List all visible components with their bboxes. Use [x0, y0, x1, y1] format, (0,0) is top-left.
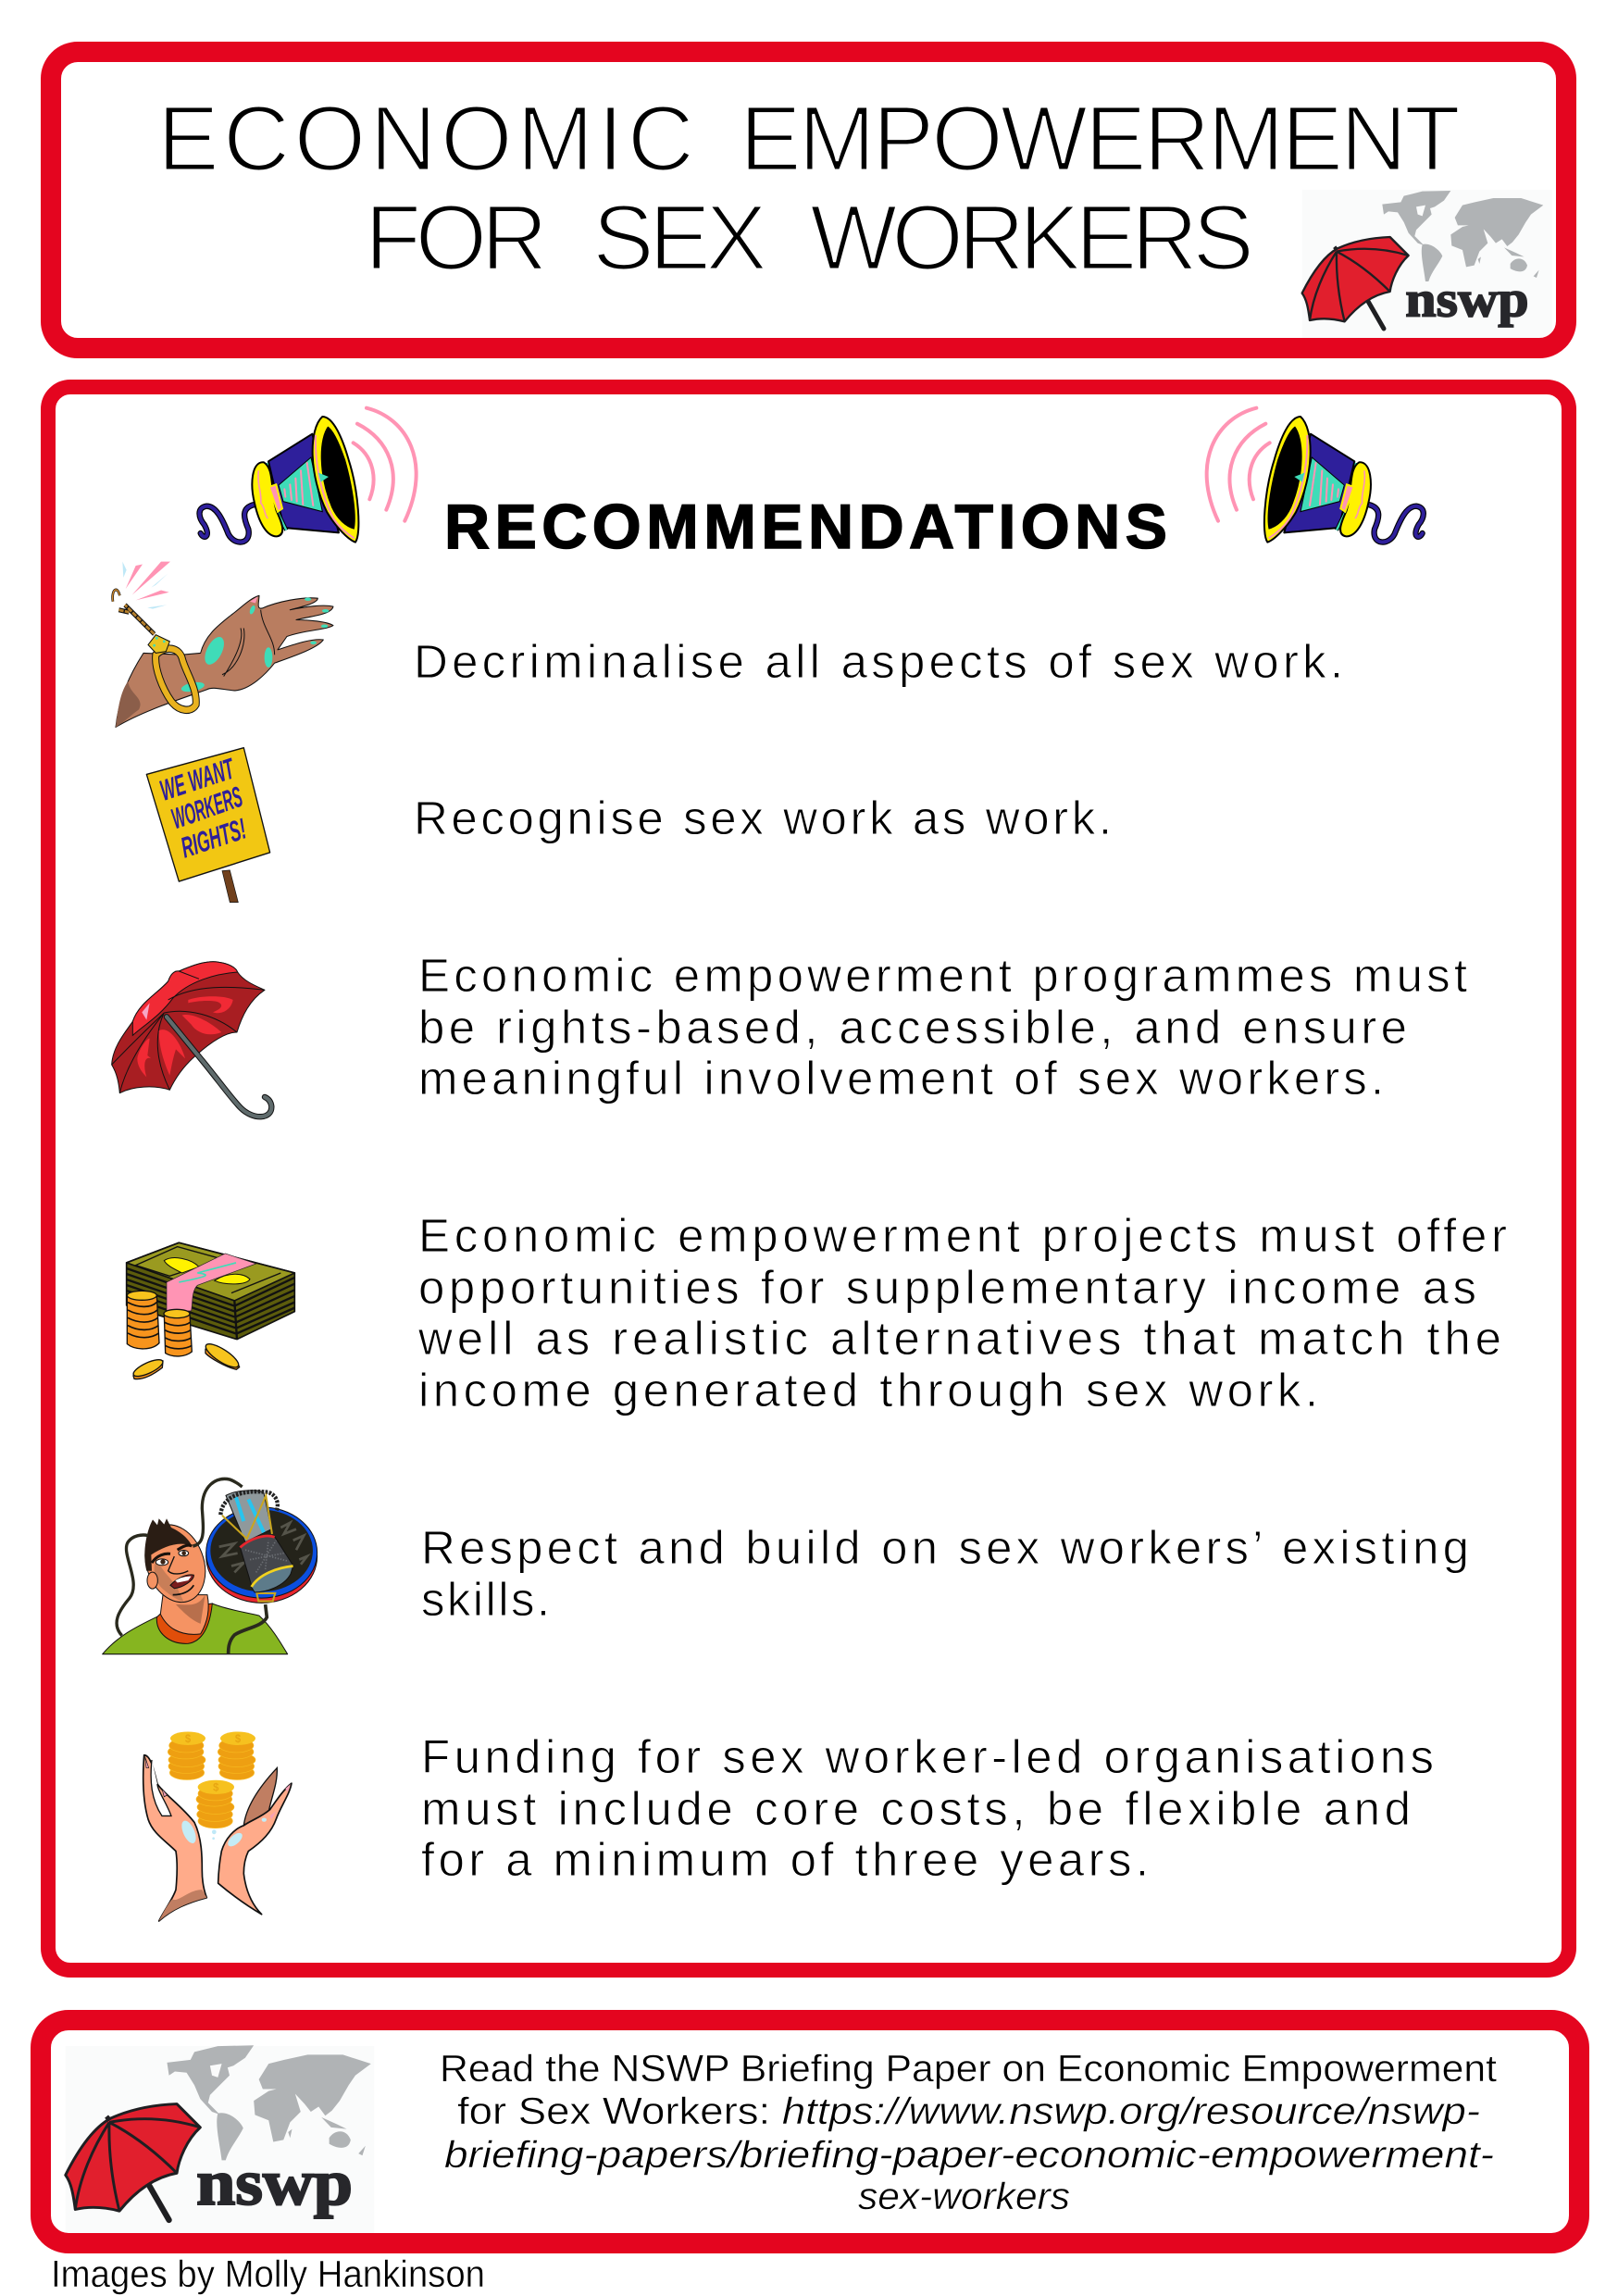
title frame — [51, 52, 1566, 348]
panel: footer — [41, 2020, 1579, 2295]
logo: nswp (footer): nswp — [196, 2148, 353, 2219]
text: briefing paper link: briefing-papers/briefing-paper-economic-empowerment- — [444, 2133, 1494, 2176]
text: briefing paper link: Read the NSWP Briefing Paper on Economic Empowerment — [440, 2047, 1498, 2090]
icon: hands and coins — [143, 1731, 292, 1921]
text: recommendation 3 — [418, 949, 1467, 1104]
text: recommendation 6: must include core costs, be flexible and — [421, 1782, 1411, 1835]
text: image credit: Images by Molly Hankinson — [51, 2252, 485, 2295]
text: briefing paper link: for Sex Workers: https://www.nswp.org/resource/nswp- — [457, 2090, 1480, 2132]
icon: hands and coins: $ — [213, 1782, 219, 1794]
icon: man with microphone — [103, 1479, 317, 1654]
icon: money and coins — [127, 1242, 294, 1379]
title text: ECONOMIC — [157, 87, 694, 191]
title text: EMPOWERMENT — [740, 87, 1461, 191]
recommendations frame — [48, 387, 1569, 1970]
text: recommendation 4: Economic empowerment projects must offer — [418, 1209, 1507, 1262]
text: recommendation 3: meaningful involvement of sex workers. — [418, 1052, 1384, 1104]
title text — [157, 87, 1461, 290]
text: recommendation 4: well as realistic alternatives that match the — [417, 1312, 1501, 1365]
text: recommendation 4 — [417, 1209, 1507, 1416]
icon: left megaphone — [199, 408, 417, 543]
text: recommendation 6: for a minimum of three years. — [421, 1833, 1149, 1886]
text: recommendation 3: be rights-based, accessible, and ensure — [418, 1001, 1407, 1054]
text: recommendation 5: Respect and build on sex workers’ existing — [421, 1521, 1469, 1574]
text: recommendation 5 — [421, 1521, 1469, 1626]
text: recommendation 3: Economic empowerment programmes must — [418, 949, 1467, 1002]
icon: hand breaking chain — [113, 562, 333, 727]
title text: SEX — [592, 186, 767, 290]
panel: recommendations — [48, 387, 1569, 1970]
icon: protest sign — [146, 748, 270, 903]
icon: right megaphone — [1207, 408, 1424, 543]
text: recommendation 6: Funding for sex worker-led organisations — [421, 1730, 1434, 1783]
text: recommendation 5: skills. — [421, 1573, 550, 1626]
footer frame — [41, 2020, 1579, 2243]
heading: recommendations: RECOMMENDATIONS — [444, 492, 1167, 562]
text: recommendation 6 — [421, 1730, 1434, 1886]
icon: protest sign: RIGHTS! — [178, 813, 250, 865]
logo: nswp (footer) — [66, 2045, 374, 2241]
icon: protest sign: WE WANT — [156, 752, 239, 807]
text: briefing paper link — [440, 2047, 1498, 2217]
icon: red umbrella — [112, 962, 271, 1117]
title text: FOR — [365, 186, 548, 290]
text: recommendation 2: Recognise sex work as work. — [414, 792, 1112, 844]
text: recommendation 4: income generated through sex work. — [418, 1364, 1318, 1416]
text: recommendation 4: opportunities for supplementary income as — [418, 1261, 1476, 1314]
panel: title — [51, 52, 1566, 348]
icon: hands and coins: $ — [235, 1734, 242, 1745]
logo: nswp (header) — [1302, 190, 1552, 338]
title text: WORKERS — [810, 186, 1254, 290]
logo: nswp (header): nswp — [1405, 271, 1529, 328]
icon: protest sign: WORKERS — [168, 780, 246, 836]
text: briefing paper link: sex-workers — [858, 2175, 1070, 2217]
text: recommendation 1: Decriminalise all aspects of sex work. — [414, 635, 1343, 688]
icon: hands and coins: $ — [185, 1734, 192, 1745]
